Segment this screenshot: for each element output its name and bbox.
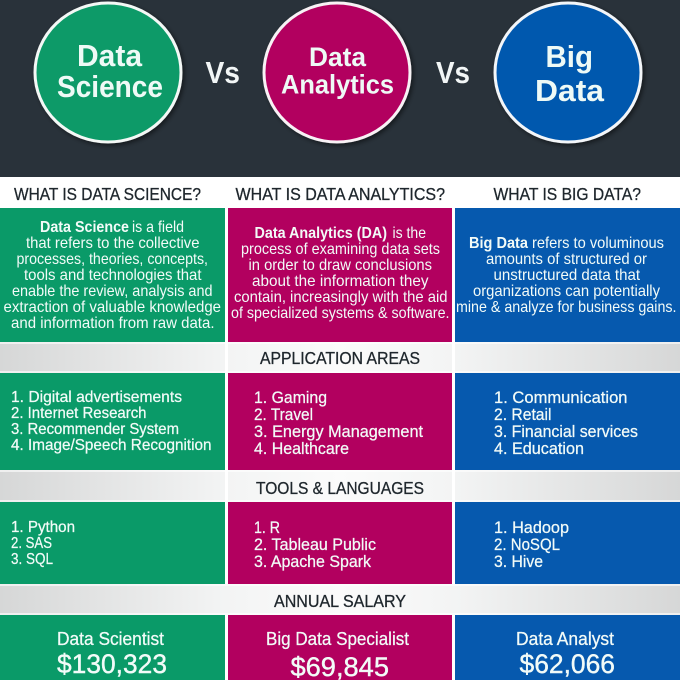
panel: big data definition: Big Data xyxy=(469,235,528,252)
panel: data analytics application areas: 1. Gaming xyxy=(254,388,327,407)
panel: data science tools: 3. SQL xyxy=(11,551,53,568)
circle: Big Data xyxy=(495,3,641,142)
panel: data science definition: Data Science xyxy=(40,219,129,236)
panel: big data application areas: 4. Education xyxy=(494,439,584,458)
panel: data analytics definition: in order to draw conclusions xyxy=(248,257,432,274)
panel: data analytics tools: 1. R xyxy=(254,518,280,537)
panel: big data application areas: 2. Retail xyxy=(494,405,552,424)
panel: data science tools: 1. Python xyxy=(11,519,75,536)
panel: data science definition: tools and technologies that xyxy=(24,267,202,284)
panel: big data definition: refers to voluminous xyxy=(532,235,664,252)
panel: data scientist salary: Data Scientist xyxy=(57,629,164,649)
header banner xyxy=(0,0,680,177)
band: application areas xyxy=(0,342,680,373)
panel: data analytics definition: is the xyxy=(392,225,426,242)
panel: data science definition: processes, theories, concepts, xyxy=(16,251,208,268)
panel: data science tools: 2. SAS xyxy=(11,535,52,552)
panel: data science definition: enable the review, analysis and xyxy=(12,283,212,300)
circle: Data Science xyxy=(35,3,181,142)
circle: Big Data: Big xyxy=(546,39,593,74)
panel: data science application areas: 2. Internet Research xyxy=(11,405,146,422)
heading: what is data science: WHAT IS DATA SCIENCE? xyxy=(14,184,201,204)
panel: data scientist salary xyxy=(0,615,225,680)
panel: data analytics tools: 3. Apache Spark xyxy=(254,552,371,571)
panel: data analytics definition: process of examining data sets xyxy=(241,241,440,258)
band: annual salary xyxy=(0,584,680,615)
panel: big data tools xyxy=(455,502,680,584)
label: Vs left: Vs xyxy=(206,55,240,90)
panel: big data definition: amounts of structured or xyxy=(486,251,648,268)
panel: data analytics definition: contain, increasingly with the aid xyxy=(234,289,448,306)
panel: big data specialist salary: Big Data Specialist xyxy=(266,629,409,649)
panel: data science application areas: 1. Digital advertisements xyxy=(11,389,182,406)
panel: data analytics tools: 2. Tableau Public xyxy=(254,535,376,554)
panel: big data application areas: 3. Financial services xyxy=(494,422,638,441)
panel: big data specialist salary xyxy=(228,615,452,680)
panel: data analytics definition: of specialized systems & software. xyxy=(231,305,450,322)
circle: Data Analytics: Data xyxy=(309,42,367,72)
panel: data analytics application areas: 3. Energy Management xyxy=(254,422,423,441)
panel: data analytics definition xyxy=(228,208,452,342)
panel: data science definition: is a field xyxy=(132,219,184,236)
panel: big data tools: 2. NoSQL xyxy=(494,535,560,554)
heading: what is data analytics: WHAT IS DATA ANALYTICS? xyxy=(236,184,445,204)
panel: data analytics tools xyxy=(228,502,452,584)
label: Vs right: Vs xyxy=(436,55,470,90)
panel: big data application areas: 1. Communication xyxy=(494,388,628,407)
panel: data analyst salary: Data Analyst xyxy=(516,629,614,649)
circle: Data Analytics: Analytics xyxy=(281,70,394,100)
band: annual salary: ANNUAL SALARY xyxy=(274,591,406,611)
panel: big data tools: 1. Hadoop xyxy=(494,518,569,537)
panel: data analyst salary xyxy=(455,615,680,680)
panel: big data tools: 3. Hive xyxy=(494,552,543,571)
panel: big data application areas xyxy=(455,373,680,470)
panel: data science definition: that refers to the collective xyxy=(26,235,200,252)
circle: Data Analytics xyxy=(264,3,410,142)
panel: data science definition: extraction of valuable knowledge xyxy=(4,299,221,316)
panel: big data definition: organizations can potentially xyxy=(473,283,660,300)
panel: data science application areas: 4. Image/Speech Recognition xyxy=(11,437,212,454)
circle: Data Science: Data xyxy=(77,38,143,73)
circle: Data Science: Science xyxy=(57,69,163,104)
panel: big data definition xyxy=(455,208,680,342)
panel: data analytics application areas: 2. Travel xyxy=(254,405,313,424)
panel: data scientist salary: $130,323 xyxy=(57,649,167,679)
panel: data science tools xyxy=(0,502,225,584)
panel: data analytics definition: about the information they xyxy=(252,273,428,290)
band: tools and languages xyxy=(0,470,680,502)
panel: data science application areas: 3. Recommender System xyxy=(11,421,179,438)
band: application areas: APPLICATION AREAS xyxy=(260,348,420,368)
panel: data analytics application areas xyxy=(228,373,452,470)
panel: data science application areas xyxy=(0,373,225,470)
band: tools and languages: TOOLS & LANGUAGES xyxy=(256,478,424,498)
heading: what is big data: WHAT IS BIG DATA? xyxy=(494,184,641,204)
circle: Big Data: Data xyxy=(535,73,605,108)
panel: data analytics definition: Data Analytics (DA) xyxy=(254,225,387,242)
panel: data science definition xyxy=(0,208,225,342)
panel: data analyst salary: $62,066 xyxy=(520,649,615,679)
panel: data science definition: and information from raw data. xyxy=(11,315,214,332)
panel: data analytics application areas: 4. Healthcare xyxy=(254,439,349,458)
panel: big data definition: unstructured data that xyxy=(494,267,641,284)
